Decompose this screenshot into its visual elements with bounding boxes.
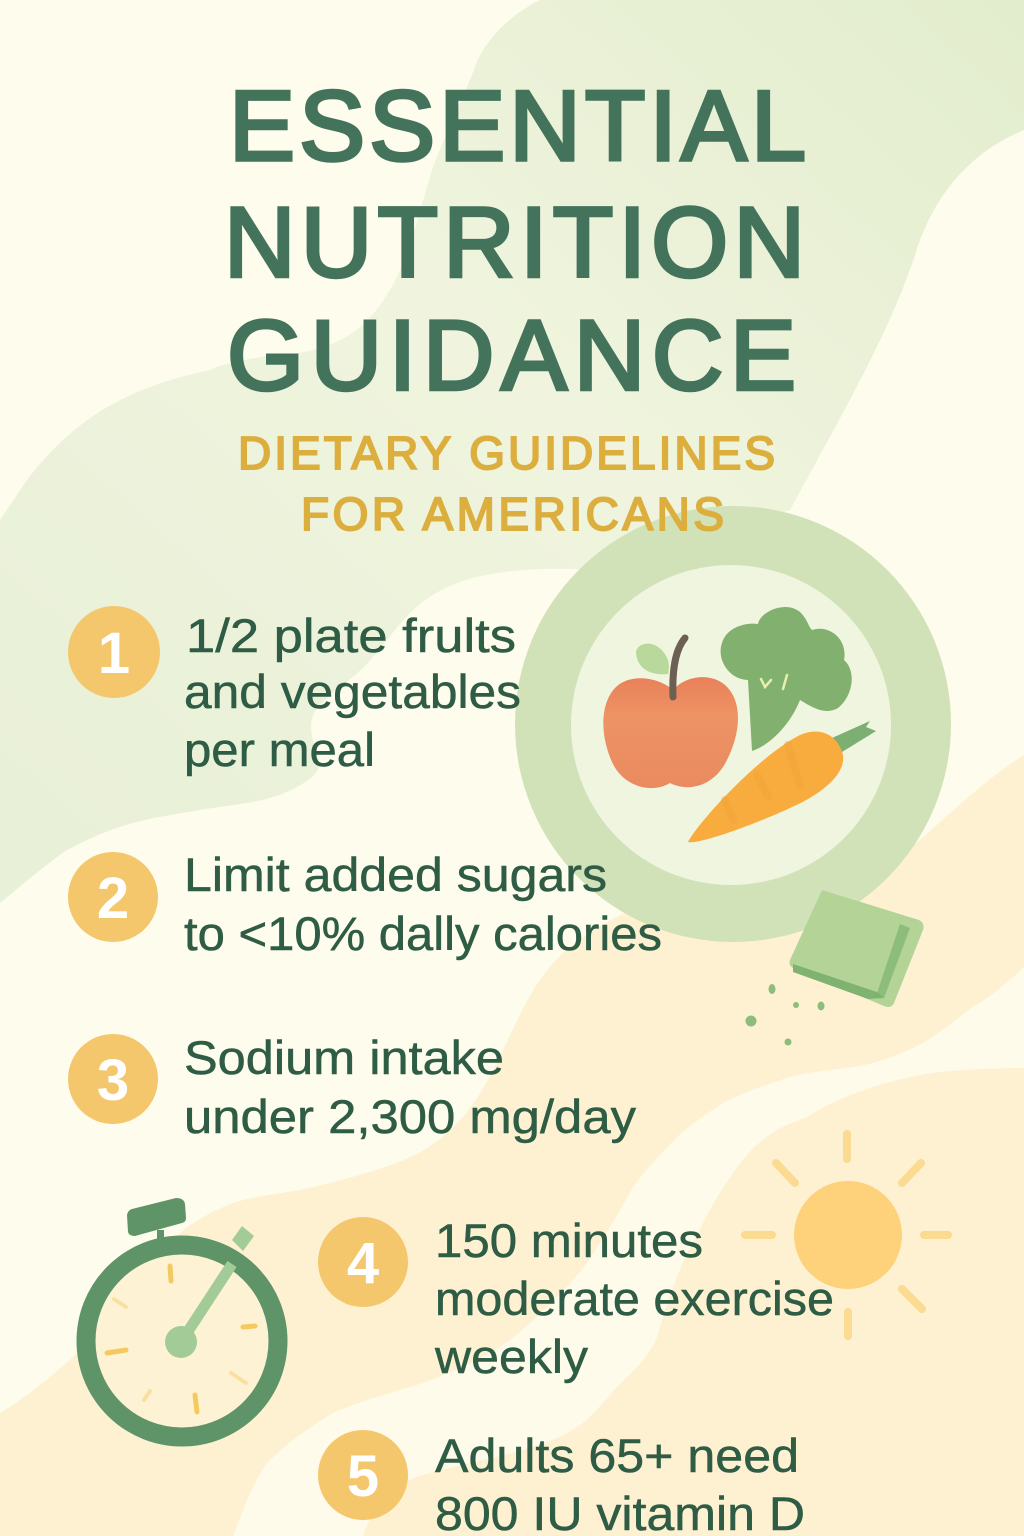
number badge 2 (68, 852, 158, 942)
number badge 2: 2 (97, 866, 129, 931)
title: ESSENTIAL (229, 70, 806, 181)
item 4 text (434, 1214, 834, 1383)
apple (603, 638, 738, 788)
number badge 3 (68, 1034, 158, 1124)
item 2 text (184, 848, 662, 960)
title: NUTRITION (224, 186, 805, 298)
number badge 1 (68, 606, 160, 698)
item 2 text: to <10% dally calories (184, 907, 662, 960)
item 4 (318, 1214, 834, 1383)
subtitle: DIETARY GUIDELINES (238, 427, 775, 479)
number badge 1: 1 (98, 621, 130, 686)
subtitle: FOR AMERICANS (301, 488, 724, 540)
item 1 text: and vegetables (184, 665, 521, 718)
item 1 text: 1/2 plate frults (186, 609, 516, 662)
item 4 text: weekly (434, 1330, 589, 1383)
carrot (688, 721, 876, 842)
number badge 4 (318, 1217, 408, 1307)
plate (515, 506, 951, 942)
icon: sun (745, 1134, 948, 1336)
number badge 5: 5 (347, 1444, 379, 1509)
item 2 text: Limit added sugars (184, 848, 607, 901)
item 4 text: 150 minutes (435, 1214, 703, 1267)
item 3 (68, 1031, 637, 1143)
item 1 text (184, 609, 521, 776)
title (224, 70, 806, 410)
item 3 text (184, 1031, 637, 1143)
item 5 text (435, 1429, 805, 1536)
broccoli (721, 607, 852, 751)
icon: sugar packet (746, 890, 924, 1046)
number badge 3: 3 (97, 1048, 129, 1113)
subtitle (238, 427, 775, 540)
item 1 text: per meal (184, 723, 375, 776)
item 2 (68, 848, 662, 960)
item 1 (68, 606, 521, 776)
number badge 4: 4 (347, 1231, 379, 1296)
number badge 5 (318, 1430, 408, 1520)
icon: stopwatch (86, 1198, 278, 1437)
item 5 text: Adults 65+ need (435, 1429, 799, 1482)
item 3 text: under 2,300 mg/day (184, 1090, 637, 1143)
item 3 text: Sodium intake (184, 1031, 504, 1084)
item 5 (318, 1429, 805, 1536)
title: GUIDANCE (227, 300, 796, 410)
icon: plate with apple, broccoli and carrot (515, 506, 951, 942)
item 4 text: moderate exercise (435, 1272, 834, 1325)
